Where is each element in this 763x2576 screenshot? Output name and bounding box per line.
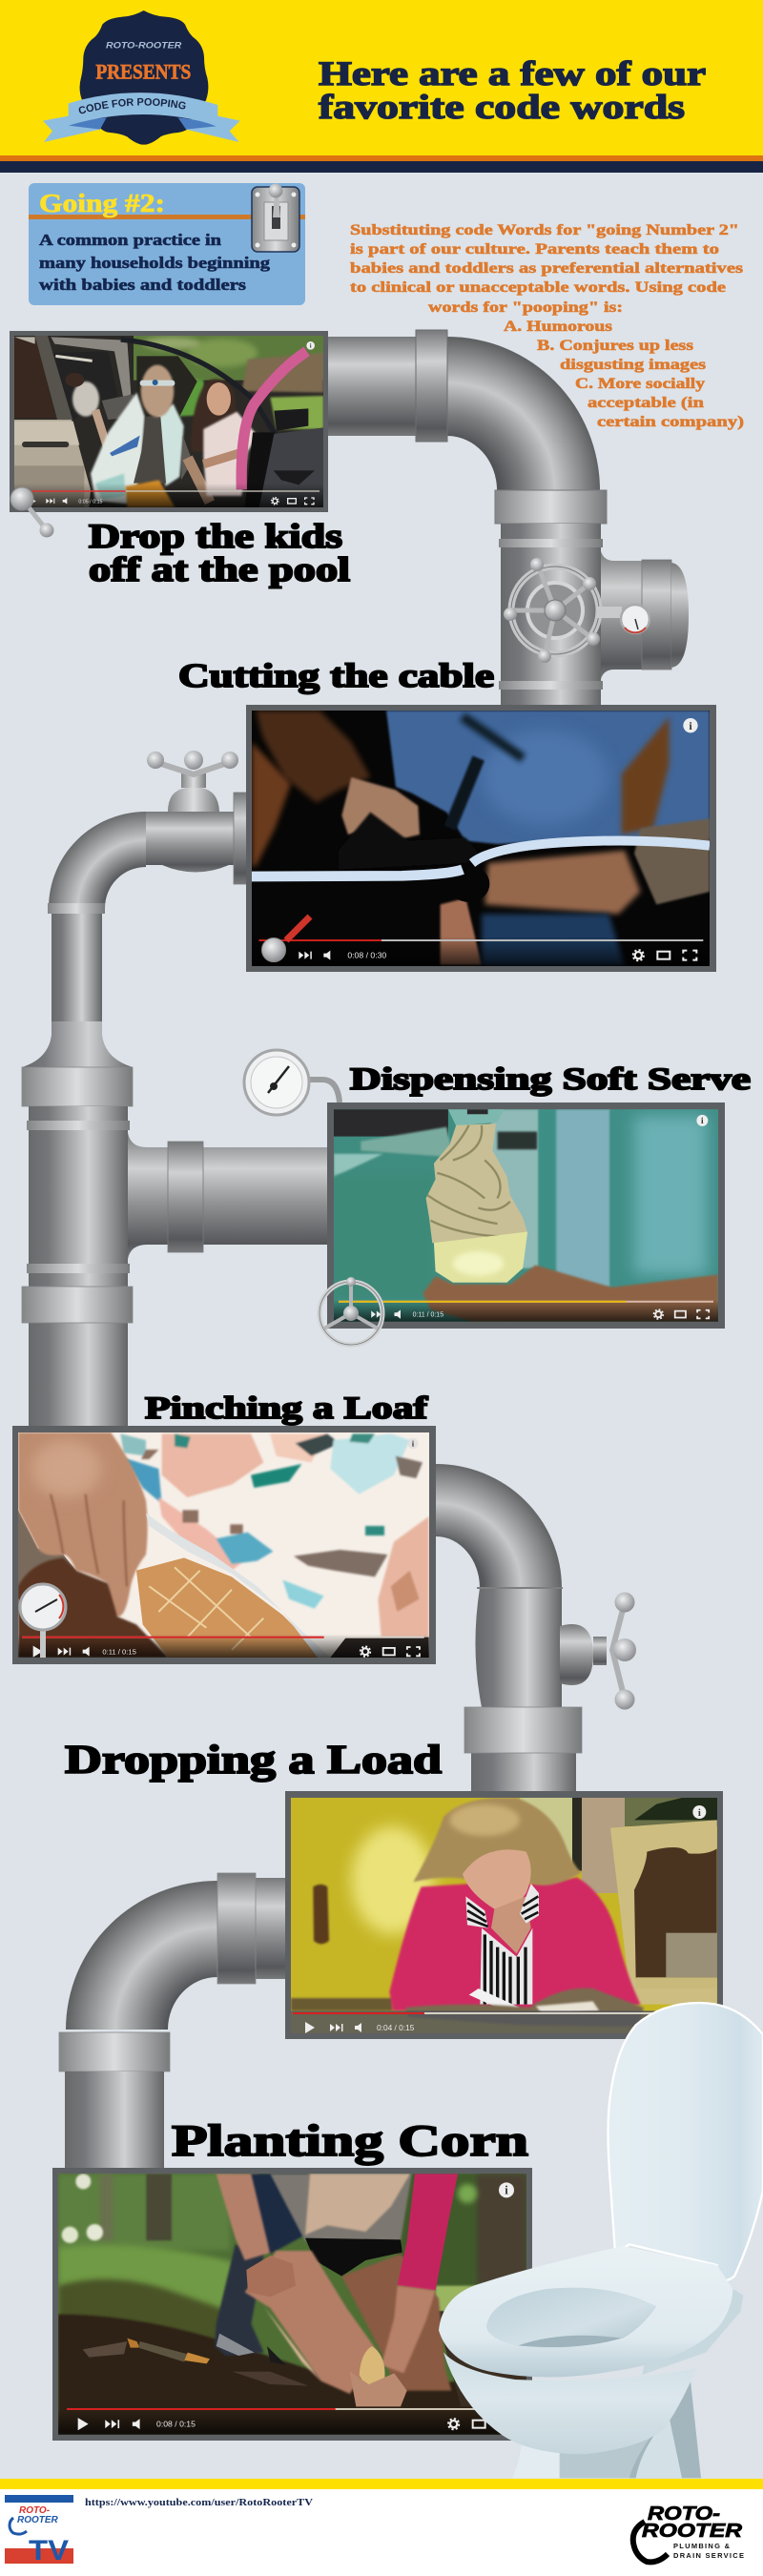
icon: metal toggle switch <box>252 183 299 252</box>
video 6: planting corn: i <box>505 2184 508 2197</box>
pipe run 2: faucet elbow <box>48 751 247 1021</box>
toilet seat <box>439 2246 743 2377</box>
heading: drop the kids off at the pool: off at the pool <box>89 550 350 588</box>
header band <box>0 0 763 173</box>
heading: dropping a load: Dropping a Load <box>65 1739 442 1783</box>
title <box>319 54 706 126</box>
intro text block: babies and toddlers as preferential alternatives <box>350 260 743 277</box>
video 6: planting corn <box>52 2168 532 2441</box>
video 4: pinching a loaf: 0:11 / 0:15 <box>102 1647 136 1656</box>
logo: Roto-Rooter TV: ROOTER <box>17 2515 59 2525</box>
badge: Roto-Rooter presents: PRESENTS <box>95 59 191 83</box>
video 5: dropping a load: 0:04 / 0:15 <box>377 2023 415 2032</box>
icon: dial pressure gauge <box>244 1050 340 1115</box>
panel body text: many households beginning <box>39 254 271 272</box>
icon: red crank handle on video 2 <box>261 917 310 961</box>
toilet bowl <box>443 2353 696 2454</box>
panel body text <box>39 231 271 294</box>
video 5: dropping a load: i <box>698 1808 701 1819</box>
video 3: dispensing soft serve <box>327 1103 725 1329</box>
intro text block: is part of our culture. Parents teach them to <box>350 241 719 258</box>
icon: handwheel valve <box>504 558 622 663</box>
toilet base <box>512 2375 701 2478</box>
pipe run 3: main tee <box>22 1021 340 1426</box>
panel body text: with babies and toddlers <box>39 276 247 294</box>
intro text block: A. Humorous <box>504 319 612 335</box>
heading: drop the kids off at the pool <box>89 517 350 588</box>
logo: Roto-Rooter plumbing and drain service: ROOTER <box>642 2521 743 2542</box>
logo: Roto-Rooter plumbing and drain service <box>633 2504 744 2562</box>
video 1: drop the kids off at the pool: 0:05 / 0:15 <box>78 499 103 505</box>
icon: three-spoke wheel on video 3 <box>320 1277 382 1345</box>
heading: drop the kids off at the pool: Drop the kids <box>89 517 342 555</box>
toilet illustration <box>439 2003 763 2478</box>
heading: Going #2: Going #2: <box>39 189 165 217</box>
heading: cutting the cable: Cutting the cable <box>178 657 494 694</box>
heading: pinching a loaf: Pinching a Loaf <box>145 1391 428 1426</box>
video 3: dispensing soft serve: i <box>701 1117 704 1126</box>
footer url: https://www.youtube.com/user/RotoRooterTV <box>85 2497 313 2508</box>
video 2: cutting the cable: i <box>689 719 692 732</box>
icon: gauge on video 4 <box>20 1584 66 1658</box>
ribbon: code for pooping: CODE FOR POOPING <box>78 97 186 114</box>
video 4: pinching a loaf <box>12 1426 436 1664</box>
panel body text: A common practice in <box>39 231 221 249</box>
intro text block: B. Conjures up less <box>537 338 693 354</box>
logo: Roto-Rooter TV: ROTO- <box>19 2505 51 2516</box>
intro text block: C. More socially <box>575 376 705 392</box>
badge: Roto-Rooter presents <box>43 10 240 145</box>
title: favorite code words <box>319 88 685 126</box>
intro text block <box>350 222 744 430</box>
badge: Roto-Rooter presents: ROTO-ROOTER <box>106 40 182 50</box>
logo: Roto-Rooter TV: TV <box>29 2535 69 2566</box>
pipe run 4: elbow with side valve <box>436 1464 636 1791</box>
heading: dispensing soft serve: Dispensing Soft Serve <box>350 1062 751 1097</box>
video 4: pinching a loaf: i <box>412 1438 415 1448</box>
ribbon: code for pooping <box>43 93 240 142</box>
title: Here are a few of our <box>319 54 706 93</box>
logo: Roto-Rooter plumbing and drain service: PLUMBING & <box>673 2542 731 2550</box>
logo: Roto-Rooter TV <box>5 2495 73 2566</box>
intro text block: words for "pooping" is: <box>428 299 623 316</box>
video 2: cutting the cable <box>246 705 716 972</box>
video 3: dispensing soft serve: 0:11 / 0:15 <box>413 1311 443 1318</box>
panel: Going #2 <box>29 183 305 305</box>
intro text block: Substituting code Words for "going Number 2" <box>350 222 739 238</box>
video 5: dropping a load <box>285 1791 723 2039</box>
video 1: drop the kids off at the pool <box>10 331 328 512</box>
pipe run 5: elbow into last video <box>59 1873 285 2168</box>
video 1: drop the kids off at the pool: i <box>310 343 312 350</box>
intro text block: acceptable (in <box>588 395 704 411</box>
video 6: planting corn: 0:08 / 0:15 <box>156 2420 196 2429</box>
intro text block: certain company) <box>597 414 744 430</box>
heading: planting corn: Planting Corn <box>172 2116 528 2166</box>
intro text block: disgusting images <box>560 357 706 373</box>
icon: small crank on video 1 <box>10 487 53 538</box>
logo: Roto-Rooter plumbing and drain service: DRAIN SERVICE <box>673 2551 744 2560</box>
icon: small pressure gauge <box>621 605 650 633</box>
logo: Roto-Rooter plumbing and drain service: ROTO- <box>648 2504 720 2524</box>
intro text block: to clinical or unacceptable words. Using code <box>350 279 726 296</box>
video 2: cutting the cable: 0:08 / 0:30 <box>347 951 386 960</box>
footer band <box>0 2479 763 2576</box>
toilet lid <box>608 2003 763 2280</box>
pipe run 1: elbow and tee with valve <box>328 330 689 705</box>
